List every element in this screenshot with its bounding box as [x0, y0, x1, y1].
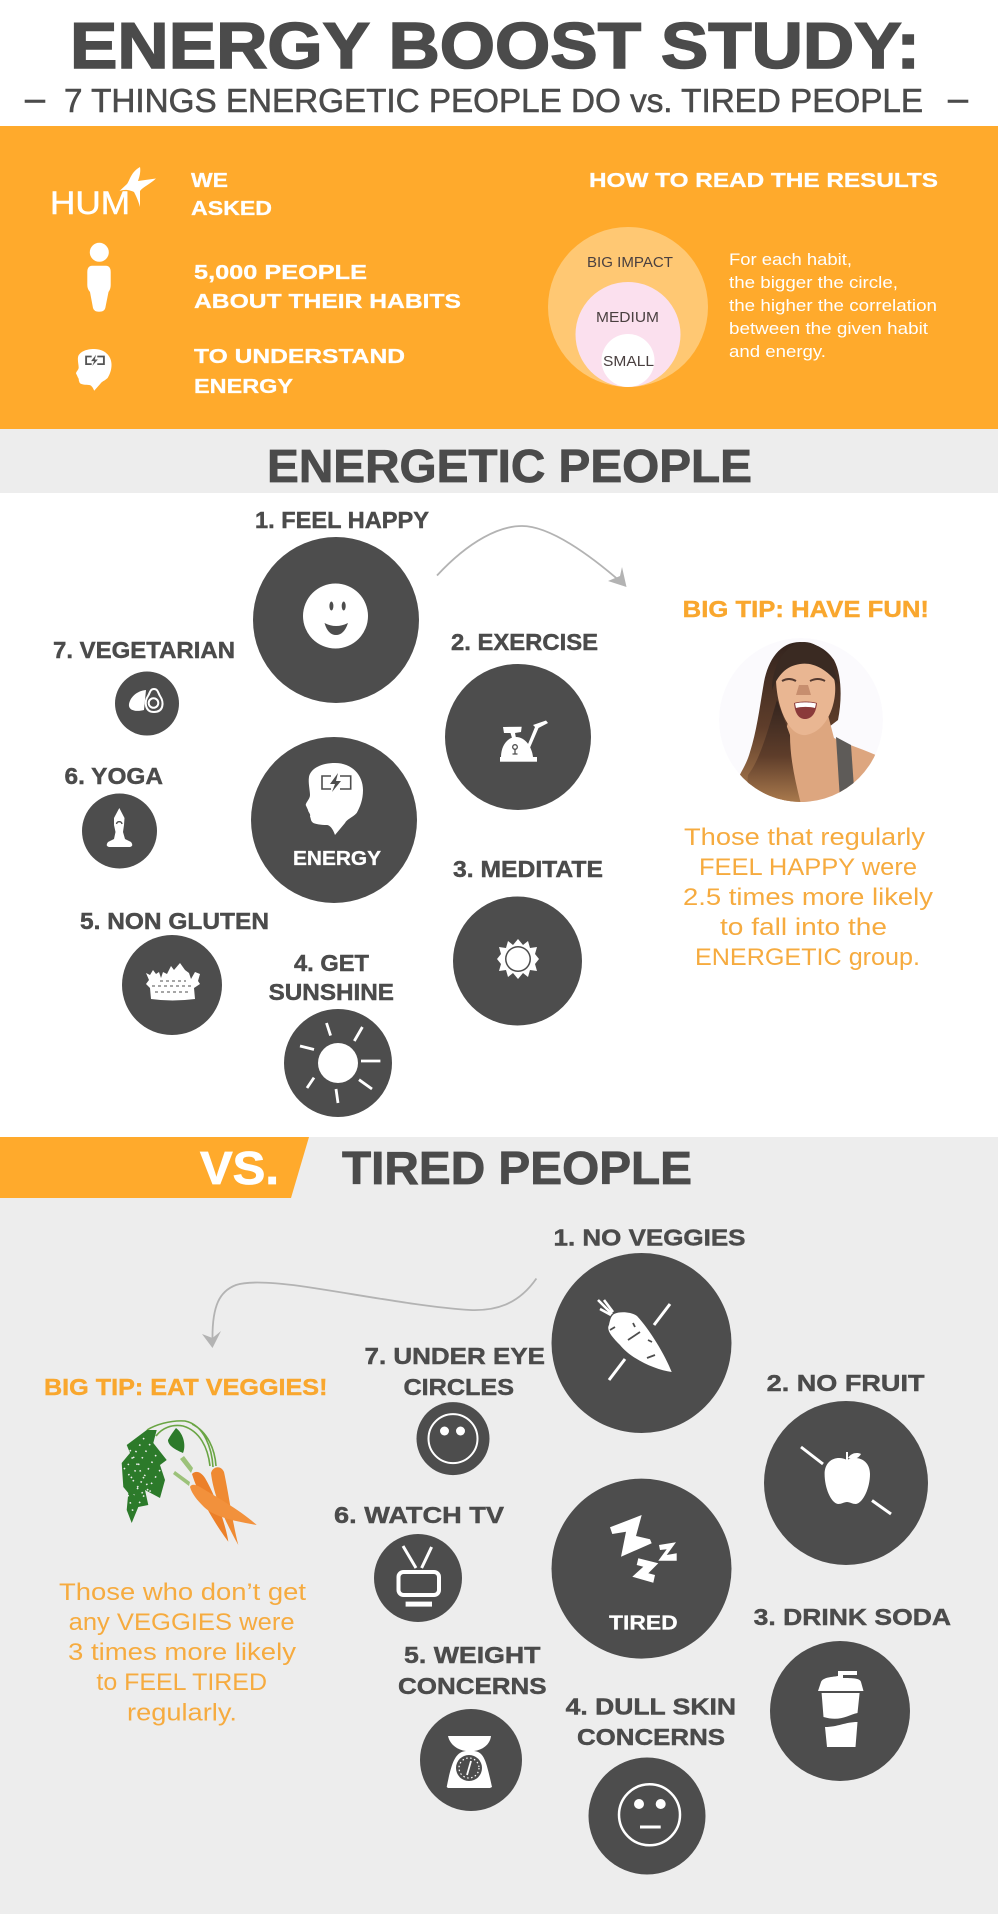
text: feel happy result: FEEL HAPPY were	[699, 854, 917, 881]
text: how to read explanation	[729, 251, 937, 361]
photo: laughing woman	[740, 642, 876, 802]
habit 2: no fruit	[764, 1370, 928, 1565]
habit 2: exercise: 2. EXERCISE	[451, 629, 598, 655]
habit 3: meditate	[453, 856, 603, 1026]
chart: impact circles legend	[548, 227, 708, 387]
big tip heading: have fun: BIG TIP: HAVE FUN!	[683, 596, 929, 622]
arrow: to eat veggies tip	[202, 1278, 536, 1348]
chart: impact circles legend: BIG IMPACT	[587, 254, 673, 271]
habit 3: drink soda: 3. DRINK SODA	[754, 1604, 951, 1630]
habit 4: dull skin concerns: 4. DULL SKIN	[566, 1694, 736, 1720]
habit 4: dull skin concerns: CONCERNS	[577, 1724, 725, 1750]
vs banner: VS.	[200, 1142, 279, 1194]
habit 3: drink soda	[754, 1604, 951, 1781]
habit 5: weight concerns: 5. WEIGHT	[404, 1642, 540, 1668]
habit 7: vegetarian: 7. VEGETARIAN	[53, 637, 235, 663]
chart: impact circles legend: MEDIUM	[596, 309, 659, 326]
text: we asked: WE	[191, 169, 228, 192]
habit 7: vegetarian	[53, 637, 235, 736]
center: energy: ENERGY	[293, 847, 381, 870]
panel: tired people	[0, 1137, 998, 1914]
heading: how to read the results: HOW TO READ THE RESULTS	[589, 169, 938, 192]
text: no veggies result: to FEEL TIRED	[96, 1669, 267, 1696]
subtitle: 7 THINGS ENERGETIC PEOPLE DO vs. TIRED PEOPLE	[64, 82, 923, 119]
habit 6: yoga: 6. YOGA	[64, 763, 163, 789]
text: to understand energy	[194, 345, 405, 398]
text: how to read explanation: the bigger the circle,	[729, 274, 898, 292]
icon: person	[87, 243, 111, 312]
vs banner	[0, 1137, 309, 1198]
habit 4: get sunshine: 4. GET	[294, 950, 369, 976]
text: we asked	[191, 169, 272, 220]
text: feel happy result: ENERGETIC group.	[695, 944, 920, 971]
heading: tired people: TIRED PEOPLE	[342, 1142, 692, 1194]
text: to understand energy: TO UNDERSTAND	[194, 345, 405, 368]
habit 6: yoga	[64, 763, 163, 868]
text: no veggies result: any VEGGIES were	[69, 1609, 295, 1636]
habit 2: no fruit: 2. NO FRUIT	[767, 1370, 924, 1396]
panel: survey intro	[0, 126, 998, 429]
image: carrots	[122, 1421, 257, 1545]
icon: energy head small	[76, 349, 112, 391]
habit 1: no veggies	[552, 1224, 746, 1433]
text: how to read explanation: between the given habit	[729, 320, 928, 338]
habit 5: non gluten	[80, 908, 269, 1035]
text: how to read explanation: For each habit,	[729, 251, 852, 269]
habit 3: meditate: 3. MEDITATE	[453, 856, 603, 882]
habit 6: watch tv: 6. WATCH TV	[334, 1502, 505, 1528]
text: how to read explanation: the higher the correlation	[729, 297, 937, 315]
arrow: to big tip	[437, 526, 626, 587]
habit 1: feel happy: 1. FEEL HAPPY	[255, 507, 429, 533]
text: how to read explanation: and energy.	[729, 343, 826, 361]
text: no veggies result	[59, 1579, 306, 1726]
habit 1: no veggies: 1. NO VEGGIES	[554, 1224, 746, 1250]
text: to understand energy: ENERGY	[194, 375, 293, 398]
habit 4: get sunshine	[269, 950, 394, 1117]
center: energy	[251, 737, 417, 903]
habit 2: exercise	[445, 629, 598, 810]
text: no veggies result: regularly.	[127, 1700, 237, 1726]
text: no veggies result: 3 times more likely	[68, 1639, 296, 1666]
heading: energetic people: ENERGETIC PEOPLE	[267, 440, 752, 492]
habit 5: non gluten: 5. NON GLUTEN	[80, 908, 269, 934]
habit 5: weight concerns: CONCERNS	[398, 1673, 547, 1699]
text: no veggies result: Those who don’t get	[59, 1579, 306, 1606]
text: we asked: ASKED	[191, 197, 272, 220]
text: feel happy result: 2.5 times more likely	[683, 884, 933, 911]
icon: HUM logo: HUM	[50, 185, 130, 221]
habit 7: under eye circles: 7. UNDER EYE	[364, 1343, 545, 1369]
habit 7: under eye circles	[364, 1343, 545, 1475]
icon: HUM logo	[50, 167, 156, 221]
big tip heading: eat veggies: BIG TIP: EAT VEGGIES!	[44, 1374, 328, 1400]
text: feel happy result	[683, 824, 933, 971]
habit 6: watch tv	[334, 1502, 505, 1622]
chart: impact circles legend: SMALL	[603, 353, 654, 370]
text: 5,000 people: ABOUT THEIR HABITS	[194, 290, 461, 313]
habit 4: get sunshine: SUNSHINE	[269, 979, 394, 1005]
title: ENERGY BOOST STUDY:	[70, 9, 920, 82]
habit 5: weight concerns	[398, 1642, 547, 1811]
heading: energetic people	[0, 429, 998, 493]
center: tired	[552, 1479, 732, 1659]
habit 4: dull skin concerns	[566, 1694, 736, 1874]
habit 7: under eye circles: CIRCLES	[404, 1374, 514, 1400]
text: 5,000 people: 5,000 PEOPLE	[194, 261, 367, 284]
center: tired: TIRED	[609, 1611, 678, 1634]
text: 5,000 people	[194, 261, 461, 313]
text: feel happy result: to fall into the	[720, 914, 887, 941]
text: feel happy result: Those that regularly	[684, 824, 925, 851]
habit 1: feel happy	[253, 507, 429, 703]
